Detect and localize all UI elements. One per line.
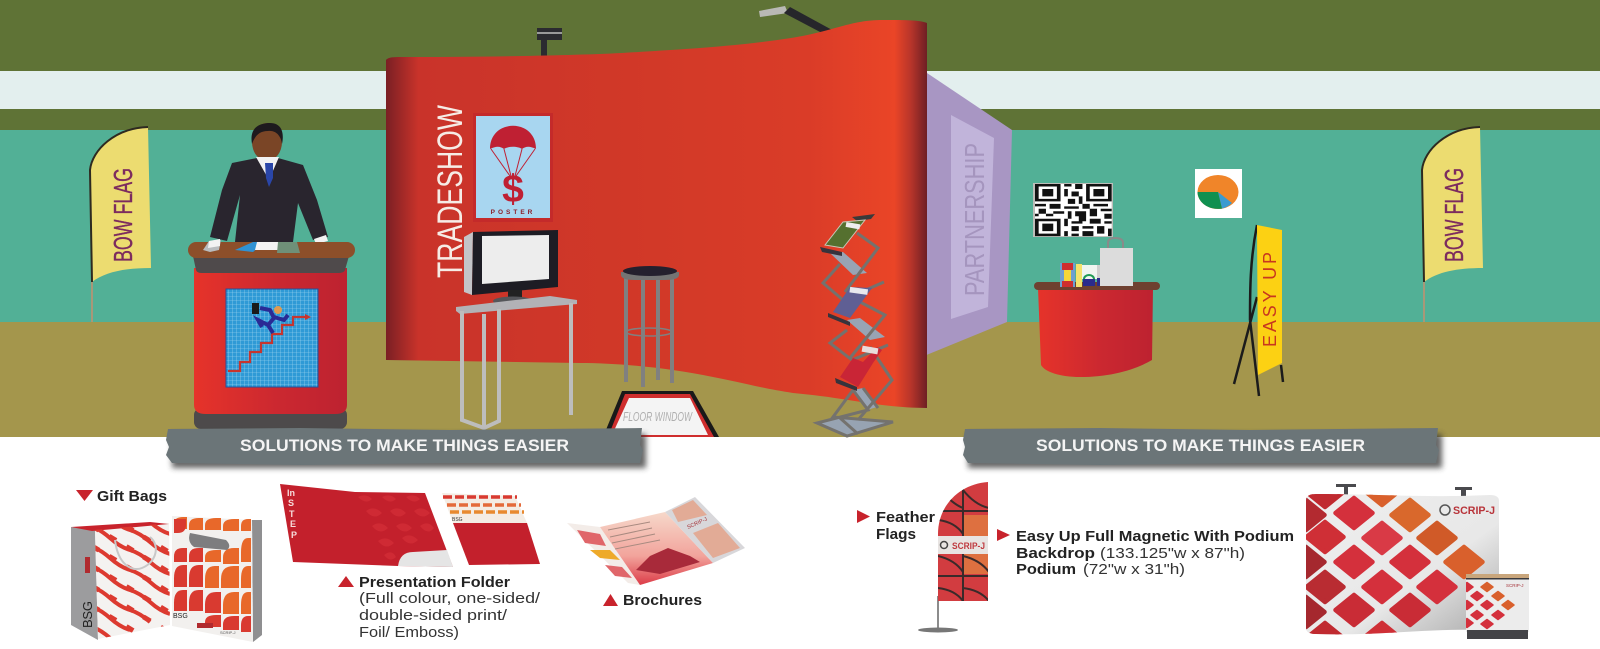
label: presentation folder [338, 574, 541, 641]
label: feather flags: Flags [876, 526, 916, 543]
section banner: left [166, 428, 646, 468]
gift bag: quarter circle pattern [172, 516, 262, 642]
literature rack [817, 214, 893, 436]
gift bag: wave pattern: BSG [80, 601, 95, 628]
easy up banner: EASY UP [1260, 252, 1280, 347]
QR code [1033, 183, 1113, 237]
label: brochures: Brochures [623, 592, 702, 609]
table with giveaways [1034, 238, 1160, 377]
bar stool [621, 266, 679, 387]
presenter in dark suit [210, 123, 328, 244]
label: easy up magnetic backdrop specs: (72"w x 31"h) [1083, 561, 1185, 578]
label: presentation folder: (Full colour, one-sided/ [359, 590, 541, 607]
label: presentation folder: Foil/ Emboss) [359, 624, 459, 641]
poster: parachute dollar [473, 113, 553, 222]
brochure [567, 497, 745, 585]
panel: curved red backwall [386, 20, 927, 408]
label: easy up magnetic backdrop specs: Podium [1016, 561, 1076, 578]
label: easy up magnetic backdrop specs: Easy Up Full Magnetic With Podium [1016, 528, 1294, 545]
backdrop product: magnetic wall [1306, 484, 1499, 634]
label: presentation folder: Presentation Folder [359, 574, 510, 591]
presentation folder: open: S [288, 498, 294, 508]
pie chart poster [1195, 169, 1242, 218]
presentation folder: open [280, 484, 453, 567]
presentation folder: back: BSG [452, 517, 463, 523]
icon: backwall camera clip [537, 28, 562, 56]
label: easy up magnetic backdrop specs: Backdrop [1016, 545, 1095, 562]
bow flag left [90, 127, 151, 322]
background: exhibition hall wall and floor [0, 0, 1600, 437]
label: easy up magnetic backdrop specs: (133.125"w x 87"h) [1100, 545, 1245, 562]
feather flag product [918, 480, 989, 632]
label: feather flags [857, 509, 935, 543]
podium counter with stair poster [188, 239, 355, 429]
backdrop product: podium: SCRIP-J [1506, 583, 1524, 588]
section banner: right: SOLUTIONS TO MAKE THINGS EASIER [1036, 437, 1365, 455]
gift bag: quarter circle pattern: BSG [173, 613, 188, 620]
side panel: partnership [924, 71, 1012, 356]
backdrop product: podium [1461, 574, 1529, 639]
bow flag right [1422, 127, 1483, 322]
section banner: right [963, 428, 1442, 468]
poster: parachute dollar: $ [502, 168, 524, 211]
bow flag right: BOW FLAG [1439, 168, 1469, 262]
gift bag: quarter circle pattern: SCRIP-J [220, 630, 236, 635]
backdrop product: magnetic wall: SCRIP-J [1453, 505, 1495, 517]
label: gift bags: Gift Bags [97, 488, 167, 505]
label: easy up magnetic backdrop specs [997, 528, 1294, 578]
gift bag: wave pattern [71, 522, 170, 640]
feather flag product: SCRIP-J [952, 541, 985, 551]
heading: tradeshow wall text: TRADESHOW [431, 105, 470, 278]
presentation folder: back [442, 493, 540, 565]
label: feather flags: Feather [876, 509, 935, 526]
floor window sign: FLOOR WINDOW [623, 409, 693, 424]
presentation folder: open: In [287, 488, 295, 498]
brochure: SCRIP-J [686, 517, 709, 531]
side panel: partnership: PARTNERSHIP [959, 143, 990, 296]
flat screen monitor [464, 230, 558, 306]
icon: backwall spotlight [759, 6, 834, 34]
monitor table [456, 296, 577, 428]
floor window sign [603, 391, 719, 437]
presentation folder: open: E [290, 519, 296, 529]
easy up banner [1234, 225, 1283, 396]
presentation folder: open: T [289, 509, 295, 519]
section banner: left: SOLUTIONS TO MAKE THINGS EASIER [240, 437, 569, 455]
label: presentation folder: double-sided print/ [359, 607, 508, 624]
bow flag left: BOW FLAG [108, 168, 138, 262]
presentation folder: open: P [291, 530, 297, 540]
poster: parachute dollar: POSTER [491, 209, 535, 216]
